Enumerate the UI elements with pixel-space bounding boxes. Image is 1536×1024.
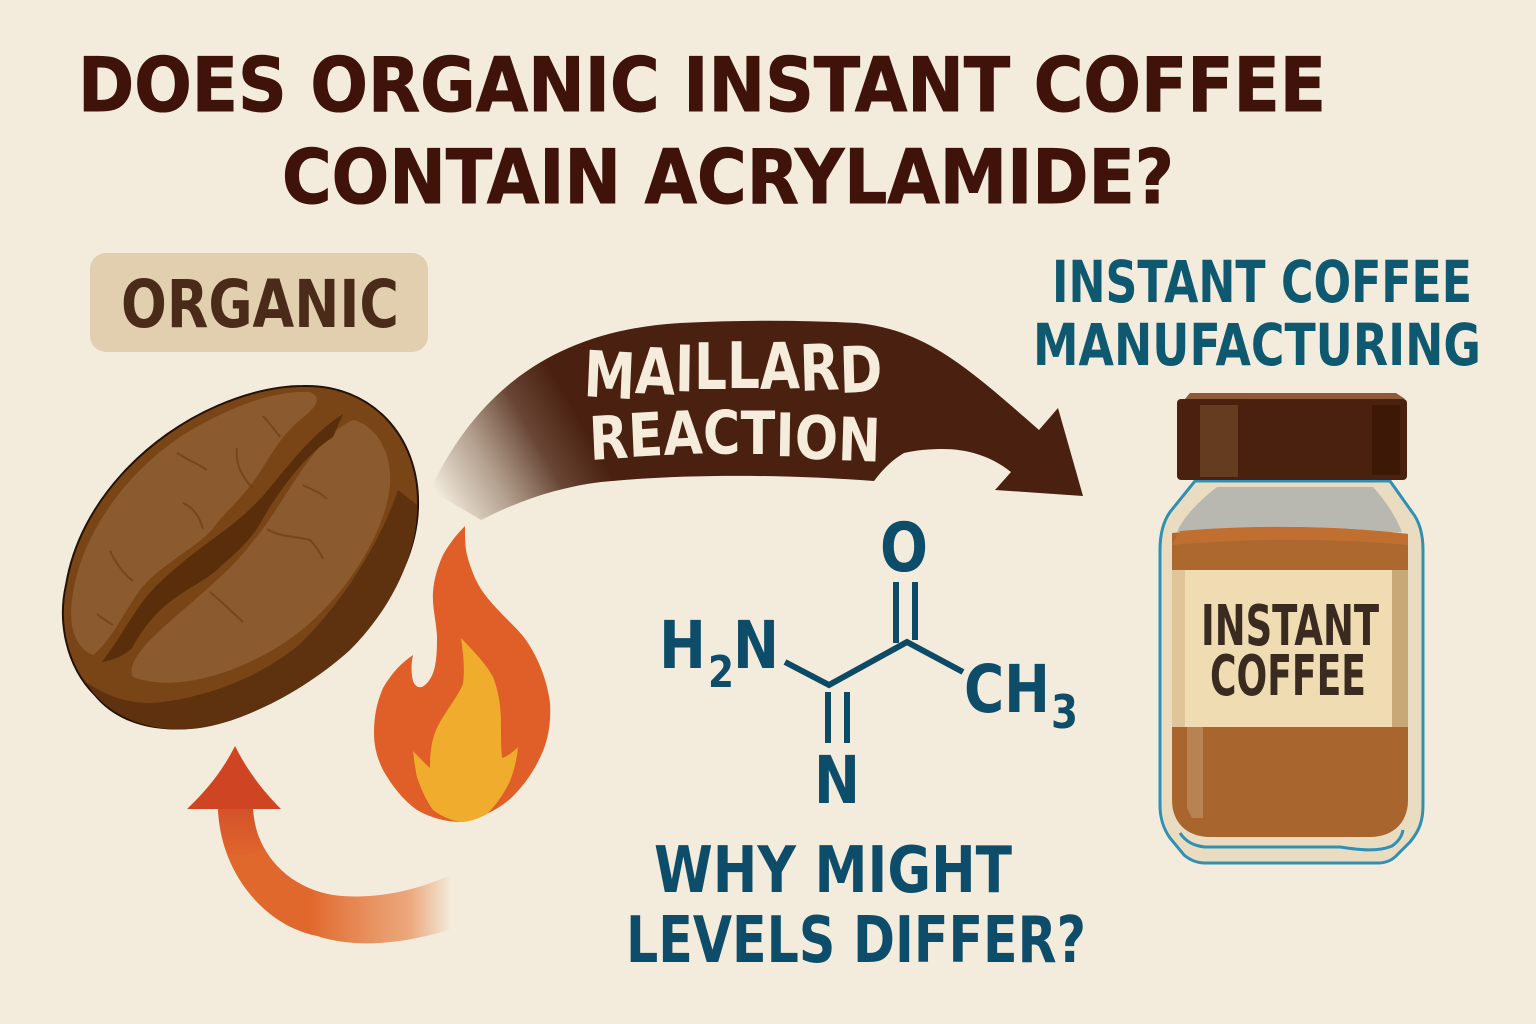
heading: instant coffee manufacturing: [1033, 248, 1481, 379]
bean central groove: [102, 414, 343, 662]
arrow: heat curve to bean: [187, 746, 452, 943]
title: DOES ORGANIC INSTANT COFFEE: [78, 41, 1326, 129]
jar empty space: [1177, 487, 1402, 532]
chemical structure: CH: [964, 651, 1050, 728]
chemical structure: N: [733, 607, 779, 684]
jar label: [1172, 570, 1408, 727]
jar lid: [1177, 399, 1407, 480]
title: [78, 41, 1326, 221]
organic label: [90, 253, 428, 352]
chemical structure: H: [659, 607, 706, 684]
arrow label: MAILLARD: [582, 330, 884, 415]
heading: why might levels differ: [626, 834, 1086, 978]
icon: coffee bean: [63, 386, 418, 729]
arrow: maillard reaction: [430, 321, 1083, 520]
chemical structure: [659, 509, 1078, 819]
bean upper lobe: [71, 392, 317, 655]
icon: instant coffee jar: [1160, 393, 1423, 863]
bean veins: [97, 416, 327, 625]
heading: why might levels differ: WHY MIGHT: [654, 834, 1012, 908]
chemical structure: 3: [1051, 685, 1078, 739]
organic label: ORGANIC: [121, 266, 399, 343]
coffee band: [1172, 527, 1408, 570]
jar label text: [1201, 594, 1379, 709]
jar label text: COFFEE: [1210, 644, 1366, 709]
arrow label: REACTION: [587, 398, 882, 476]
heading: why might levels differ: LEVELS DIFFER?: [626, 904, 1086, 978]
jar bottom reflections: [1180, 830, 1403, 850]
jar glass: [1160, 481, 1423, 863]
glass highlight: [1187, 727, 1203, 818]
chemical structure: O: [880, 509, 928, 588]
bean lower lobe: [132, 420, 390, 683]
bean shadow crescent: [86, 490, 417, 729]
title: CONTAIN ACRYLAMIDE?: [282, 133, 1174, 221]
icon: flame: [374, 526, 550, 822]
coffee body: [1172, 727, 1408, 837]
jar label text: INSTANT: [1201, 594, 1379, 659]
chemical structure: N: [814, 742, 860, 819]
arrow label: [582, 330, 884, 476]
chemical structure: 2: [708, 647, 734, 698]
